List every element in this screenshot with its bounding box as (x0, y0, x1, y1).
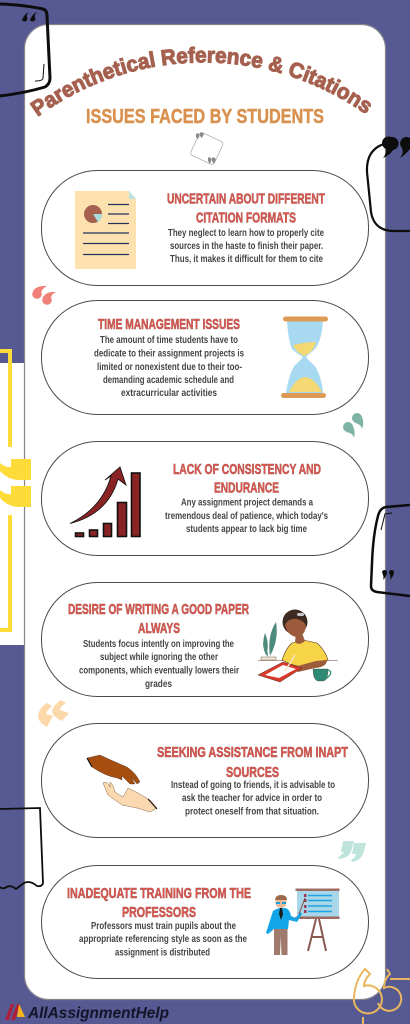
heading: ENDURANCE (214, 481, 279, 497)
heading: UNCERTAIN ABOUT DIFFERENT (167, 192, 325, 208)
body text: Professors must train pupils about the (91, 921, 236, 932)
quote: teal (343, 413, 363, 438)
body text: grades (145, 679, 172, 690)
subtitle: ISSUES FACED BY STUDENTS (86, 105, 324, 128)
body text: Students focus intently on improving the (83, 639, 234, 650)
heading: INADEQUATE TRAINING FROM THE (67, 886, 251, 902)
heading (173, 462, 321, 497)
quote: coral (32, 286, 56, 305)
body text: dedicate to their assignment projects is (94, 348, 244, 360)
body text (165, 498, 328, 535)
heading: PROFESSORS (122, 905, 196, 921)
decorative frame: mid right (371, 505, 410, 596)
body text: Instead of going to friends, it is advisable to (171, 780, 335, 791)
quote: orange outline (354, 969, 410, 1024)
icon: student writing (258, 610, 338, 682)
body text: subject while ignoring the other (100, 652, 218, 663)
body text: The amount of time students have to (100, 335, 238, 346)
panel: uncertain about citation formats (42, 170, 368, 286)
quote: peach (38, 700, 69, 727)
body text (79, 921, 247, 958)
decorative frame: upper right (367, 136, 410, 231)
body text: They neglect to learn how to properly cite (168, 228, 324, 239)
heading (68, 602, 249, 637)
panel: time management (42, 300, 368, 414)
heading: LACK OF CONSISTENCY AND (173, 462, 321, 478)
icon: document (75, 191, 136, 269)
body text: extracurricular activities (121, 388, 217, 399)
body text (171, 780, 335, 818)
left white strip (0, 363, 25, 645)
panel: desire of writing a good paper (42, 582, 368, 696)
body text: appropriate referencing style as soon as the (79, 934, 247, 945)
body text: ask the teacher for advice in order to (182, 793, 322, 804)
icon: rising bars with arrow (70, 467, 140, 536)
icon: hands (87, 755, 157, 812)
heading (67, 886, 251, 921)
heading (167, 192, 325, 226)
quote: mint (338, 841, 366, 862)
body text: sources in the haste to finish their paper. (170, 241, 323, 252)
heading: CITATION FORMATS (196, 210, 296, 226)
panel: consistency and endurance (42, 442, 368, 556)
body text (168, 228, 324, 265)
logo: AllAssignmentHelp (27, 1005, 169, 1022)
heading (157, 745, 348, 781)
heading: ALWAYS (138, 621, 180, 637)
body text (94, 335, 244, 399)
icon: hourglass (281, 316, 328, 398)
panel: inadequate training (42, 866, 368, 978)
decorative yellow frame and quote (0, 351, 31, 630)
body text: Any assignment project demands a (181, 498, 313, 509)
body text: tremendous deal of patience, which today's (165, 511, 328, 522)
body text: assignment is distributed (115, 948, 210, 958)
decorative frame: top left (0, 4, 50, 96)
heading: DESIRE OF WRITING A GOOD PAPER (68, 602, 249, 618)
body text: protect oneself from that situation. (185, 806, 319, 818)
body text: Thus, it makes it difficult for them to cite (170, 254, 323, 265)
icon: professor at board (266, 888, 340, 955)
body text: students appear to lack big time (186, 524, 307, 535)
heading: SEEKING ASSISTANCE FROM INAPT (157, 745, 348, 761)
body text (79, 639, 239, 690)
icon: note with quotes (190, 132, 224, 165)
heading: TIME MANAGEMENT ISSUES (98, 317, 240, 333)
body text: limited or nonexistent due to their too- (97, 362, 242, 373)
body text: demanding academic schedule and (103, 375, 234, 386)
title: Parenthetical Reference & Citations (30, 46, 371, 117)
panel: seeking assistance (42, 724, 368, 838)
decorative frame: bottom left (0, 808, 43, 889)
body text: components, which eventually lowers their (79, 666, 239, 676)
heading: SOURCES (226, 765, 279, 781)
